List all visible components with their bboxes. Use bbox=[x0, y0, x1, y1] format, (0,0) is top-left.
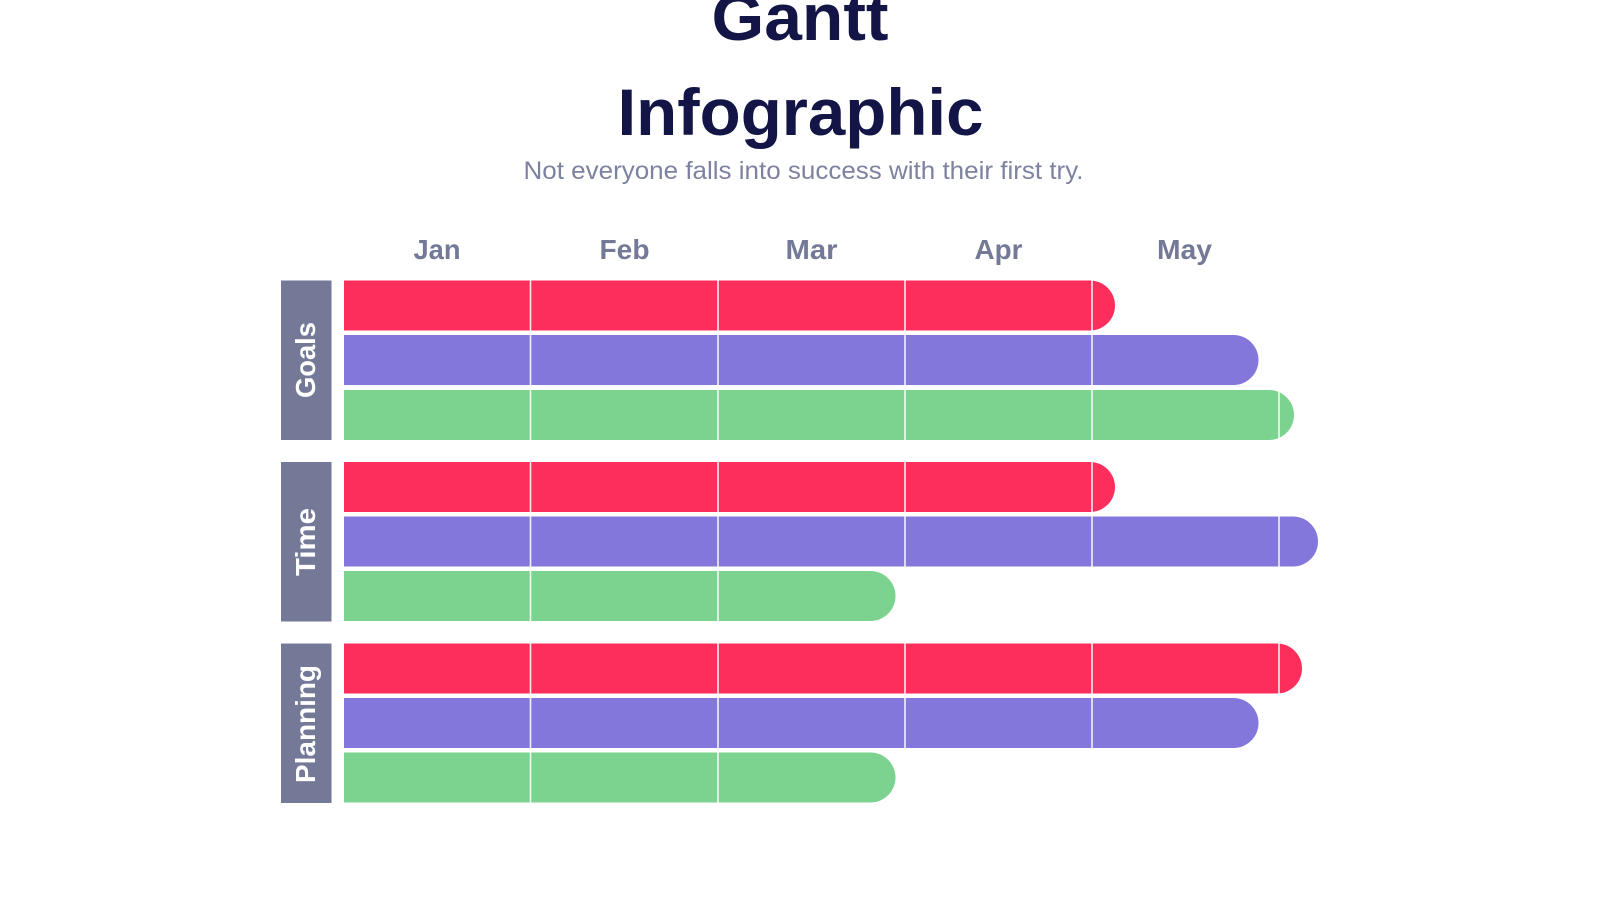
planning bar: green bbox=[344, 752, 896, 802]
time bar: purple bbox=[344, 516, 1318, 566]
time label bbox=[281, 462, 332, 622]
panel: time bbox=[281, 462, 1318, 622]
goals label: Goals bbox=[290, 322, 321, 398]
time bar: red bbox=[344, 462, 1115, 512]
title: Infographic bbox=[618, 75, 984, 149]
month headers: Feb bbox=[600, 234, 650, 265]
time bar: green bbox=[344, 571, 896, 621]
month headers: Apr bbox=[974, 234, 1023, 265]
month headers: Jan bbox=[414, 234, 460, 265]
goals bar: red bbox=[344, 280, 1115, 330]
planning bar: purple bbox=[344, 698, 1258, 748]
goals bar: purple bbox=[344, 335, 1258, 385]
subtitle: Not everyone falls into success with their first try. bbox=[524, 157, 1084, 185]
panel: planning bbox=[281, 644, 1302, 803]
month headers bbox=[414, 234, 1212, 265]
month headers: Mar bbox=[786, 234, 838, 265]
title bbox=[618, 0, 984, 149]
time label: Time bbox=[290, 508, 321, 576]
planning label bbox=[281, 644, 332, 803]
panel: goals bbox=[281, 280, 1294, 440]
goals bar: green bbox=[344, 390, 1294, 440]
planning bar: red bbox=[344, 644, 1302, 694]
planning label: Planning bbox=[290, 665, 321, 783]
month headers: May bbox=[1157, 234, 1212, 265]
goals label bbox=[281, 280, 332, 440]
